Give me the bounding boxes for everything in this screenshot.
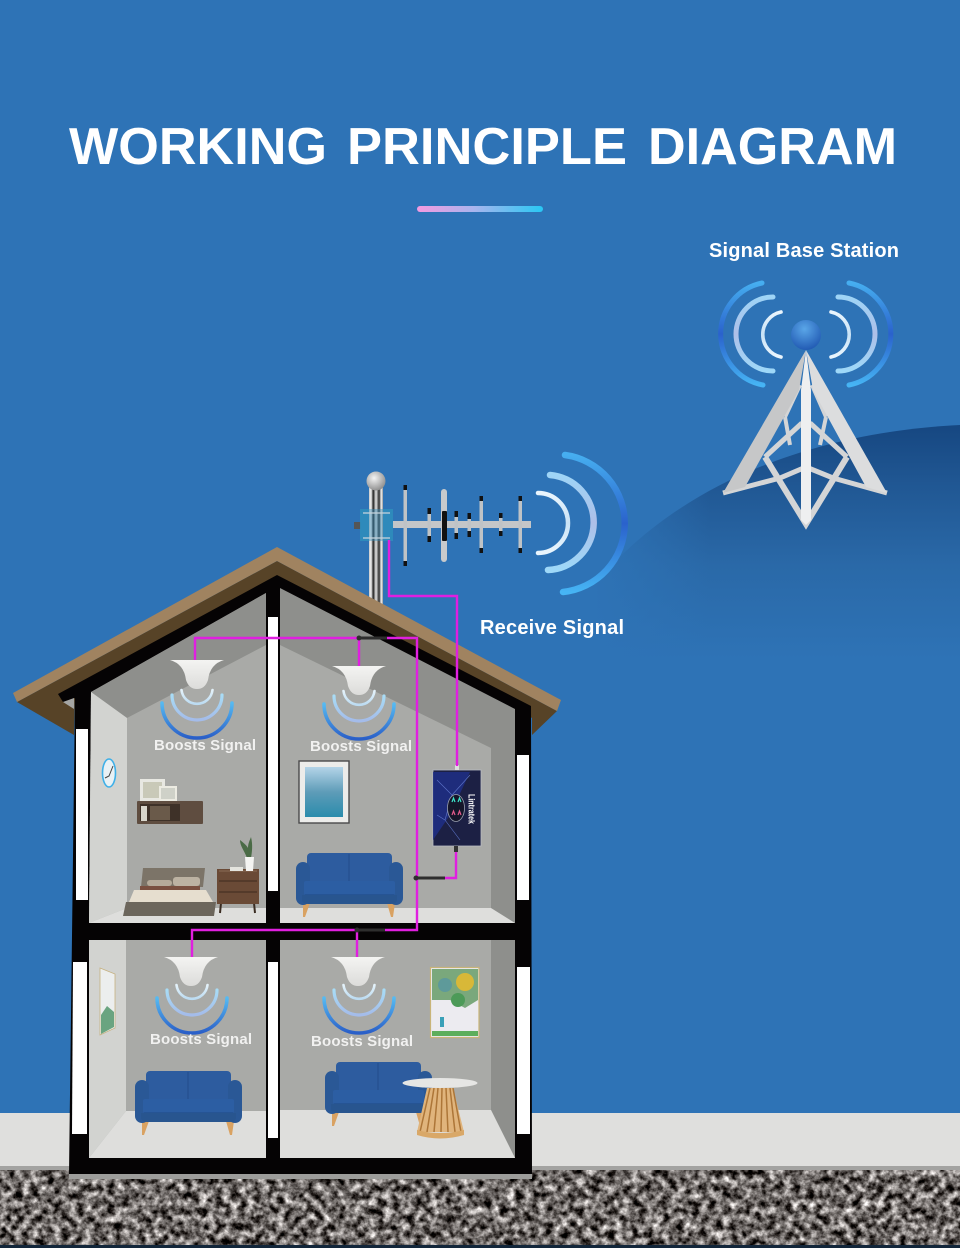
nightstand with plant [217, 837, 259, 913]
label: signal base station: Signal Base Station [709, 240, 899, 262]
sofa: lower left room [135, 1071, 242, 1135]
hill behind base station [590, 420, 960, 665]
title [69, 118, 897, 176]
room: upper right lounge [280, 588, 515, 923]
ceiling antenna: upper left [154, 660, 256, 754]
bottom strip [0, 1245, 960, 1248]
room: lower right [280, 940, 515, 1158]
windows [72, 617, 530, 1138]
bed [123, 868, 216, 916]
room: lower left [89, 940, 266, 1158]
ceiling antenna: lower left: Boosts Signal [150, 1031, 252, 1048]
ceiling antenna: lower right [311, 957, 413, 1050]
yagi antenna [354, 485, 531, 566]
sofa: lower right room [325, 1062, 432, 1126]
label: receive signal: Receive Signal [480, 617, 624, 639]
pavement edge [0, 1166, 960, 1171]
wall picture: girl with balloon [430, 968, 479, 1038]
round table [402, 1078, 478, 1138]
wall picture: side [100, 968, 115, 1035]
mast pole [366, 472, 386, 604]
house [13, 547, 561, 1174]
black frame [58, 575, 532, 1174]
gravel soil [0, 1170, 960, 1245]
ceiling antenna: upper left: Boosts Signal [154, 737, 256, 754]
title underline [417, 206, 543, 212]
roof top band [13, 547, 561, 711]
icon: base station tower [721, 283, 891, 525]
repeater unit: Lintratek [466, 794, 476, 825]
ground pavement [0, 1113, 960, 1166]
room: upper left bedroom [89, 593, 266, 923]
title: PRINCIPLE [347, 118, 627, 176]
ceiling antenna: lower left [150, 957, 252, 1048]
sofa: upper room [296, 853, 403, 917]
title: DIAGRAM [648, 118, 897, 176]
foundation strip [69, 1174, 532, 1179]
receive signal waves [538, 455, 625, 592]
ceiling antenna: upper right: Boosts Signal [310, 738, 412, 755]
repeater unit [433, 765, 481, 852]
coax cables [192, 540, 457, 958]
wall picture: lake [299, 761, 349, 823]
splitters [354, 636, 445, 932]
roof underside [17, 561, 557, 735]
shelf with pictures [137, 779, 203, 824]
ceiling antenna: upper right [310, 666, 412, 755]
tower signal waves [721, 283, 891, 385]
ceiling antenna: lower right: Boosts Signal [311, 1033, 413, 1050]
wall clock [102, 759, 116, 787]
title: WORKING [69, 118, 327, 176]
tower lattice [723, 385, 887, 524]
